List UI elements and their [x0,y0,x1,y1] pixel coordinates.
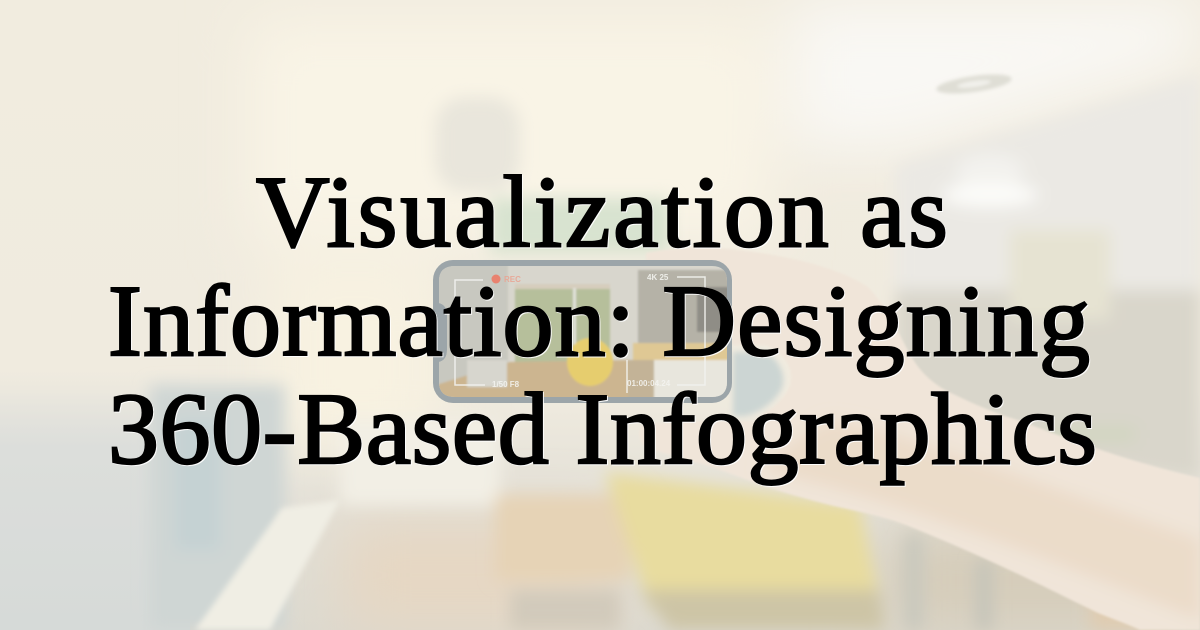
garden through window [490,198,670,253]
record indicator [492,274,500,284]
white bench [195,500,340,630]
right wall [895,75,1200,300]
camera readouts: 1/50 F8 [492,380,520,389]
sofa [605,472,880,610]
pendant lamp [435,97,520,192]
hand holding phone [639,248,1200,630]
phone screen photo [436,263,730,400]
camera readouts: 01:00:04.24 [627,379,671,388]
ceiling lamp [956,154,1024,190]
phone body [433,260,732,403]
title [108,156,1097,486]
camera viewfinder marks [455,277,705,393]
ceiling spot [935,71,1013,97]
camera readouts [492,273,671,389]
camera readouts: REC [504,275,521,284]
title: Information: Designing [108,265,1090,378]
table [495,495,630,580]
title: 360-Based Infographics [108,373,1097,486]
title: Visualization as [256,156,948,269]
camera readouts: 4K 25 [647,273,669,282]
phone [433,260,732,403]
floor area [340,420,500,505]
TV [150,385,285,630]
gap between phone and hand [733,352,783,416]
